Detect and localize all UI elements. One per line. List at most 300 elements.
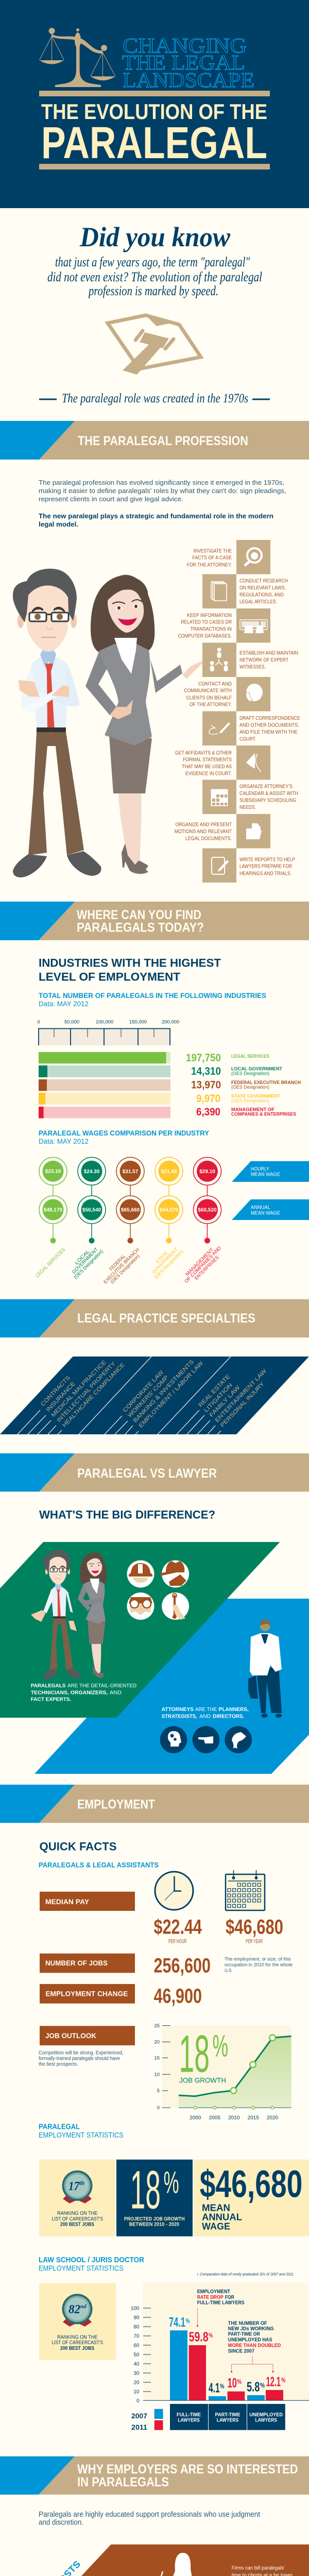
text: job outlook note: [39, 2050, 124, 2067]
values: 6,390: [196, 1106, 220, 1118]
panel: ranking 82nd: RANKING ON THE: [57, 2334, 98, 2340]
panel: ranking 82nd: 82: [68, 2303, 80, 2316]
chart: job growth: 18: [179, 2025, 210, 2083]
icon: eye profile: [246, 753, 261, 772]
stat: median pay values: [153, 1916, 283, 1945]
panel: mean annual wage: MEAN: [202, 2202, 230, 2213]
column: local government: LOCAL: [74, 1249, 91, 1266]
chart: JD employment: 60: [133, 2343, 140, 2348]
icon: head with gears: [160, 1726, 187, 1753]
column: specialties 3: PERSONAL INJURY: [219, 1381, 266, 1429]
chart: job growth: 2020: [267, 2115, 279, 2121]
task text list: GET AFFIDAVITS & OTHER: [175, 750, 232, 756]
note: employment size: U.S.: [225, 1968, 233, 1973]
did you know intro: profession is marked by speed.: [88, 283, 218, 298]
chart: job growth: 5: [157, 2088, 160, 2094]
heading: paralegal employment statistics: [39, 2123, 124, 2140]
industry labels: STATE GOVERNMENT: [231, 1093, 280, 1099]
chart: job growth: 2015: [248, 2115, 259, 2121]
task text list: OF THE ATTORNEY.: [190, 702, 232, 708]
icon: calendar: [226, 1870, 265, 1910]
heading: industries: [39, 957, 221, 984]
text: job outlook note: the best prospects.: [39, 2061, 78, 2067]
text: paralegals description: AND: [110, 1689, 122, 1696]
label: employment change: EMPLOYMENT CHANGE: [45, 1989, 128, 1997]
chart: JD employment: 80: [133, 2325, 140, 2330]
text: reduce costs: [232, 2565, 293, 2576]
heading: law school statistics: LAW SCHOOL / JURIS DOCTOR: [39, 2256, 144, 2264]
column: state government: $44,570: [160, 1208, 179, 1213]
banner: legal practice specialties: [0, 1299, 309, 1337]
bar values: 59.8: [189, 2329, 209, 2344]
illustration: attorney: [248, 1619, 282, 1718]
column: specialties 3: FAMILY LAW: [209, 1384, 242, 1418]
subtitle: changing the legal landscape: CHANGING: [123, 33, 247, 57]
chart: JD employment: 10: [133, 2389, 140, 2395]
banner: where can you find paralegals: WHERE CAN YOU FIND: [77, 908, 201, 922]
did you know intro: did not even exist? The evolution of the paralegal: [47, 269, 262, 284]
task text list: ORGANIZE ATTORNEY'S: [239, 784, 293, 789]
panel: projected job growth: 18: [130, 2160, 161, 2221]
panel: paralegals: [0, 1542, 280, 1718]
column: federal executive branch: FEDERAL: [108, 1253, 127, 1272]
icon: clock: [155, 1872, 193, 1910]
icon: big fish: [225, 1726, 252, 1753]
subtitle: changing the legal landscape: THE LEGAL: [122, 50, 245, 74]
legend: annual mean wage: [232, 1199, 309, 1220]
column: specialties 1: MEDICAL MALPRACTICE: [50, 1359, 108, 1418]
column: state government: [151, 1157, 185, 1280]
industry labels: FEDERAL EXECUTIVE BRANCH: [231, 1080, 301, 1086]
chart categories: UNEMPLOYED: [249, 2412, 283, 2418]
banner: paralegal vs lawyer: PARALEGAL VS LAWYER: [77, 1466, 217, 1481]
task text list: COURT.: [239, 736, 256, 742]
chart: job growth: 0: [157, 2105, 160, 2111]
bar values: [169, 2314, 286, 2395]
industry labels: (OES Designation): [231, 1084, 269, 1090]
hand left: [31, 1610, 45, 1622]
legend: hourly mean wage: [232, 1161, 309, 1182]
panel: mean annual wage: WAGE: [202, 2221, 230, 2231]
task text list: RELATED TO CASES OR: [181, 620, 232, 625]
illustration: paralegal woman presenting: [85, 575, 206, 874]
task text list: CALENDAR & ASSIST WITH: [239, 791, 298, 796]
column: management of companies: [183, 1157, 222, 1284]
bar values: %: [281, 2376, 286, 2384]
task text list: ORGANIZE AND PRESENT: [176, 822, 232, 828]
panel: ranking 82nd: [39, 2283, 116, 2360]
chart: job growth: 2005: [209, 2115, 220, 2121]
callout: role created in the 1970s: The paralegal role was created in the 1970s: [62, 392, 248, 405]
label: number of jobs: [40, 1954, 135, 1973]
label: median pay: [40, 1892, 135, 1911]
icon: documents: [211, 582, 227, 601]
text: profession description: making it easier to define paralegals' roles by what they can't do: sign pleadings,: [39, 487, 286, 495]
icon: scales of justice: [39, 28, 115, 87]
axis scale: 100,000: [96, 1020, 113, 1025]
column: federal executive branch: [102, 1157, 144, 1285]
values: 9,970: [196, 1093, 220, 1105]
column: management of companies: OF COMPANIES AND: [183, 1245, 222, 1284]
stat: median pay values: PER HOUR: [168, 1939, 186, 1945]
subheading: total number of paralegals: Data: MAY 2012: [39, 1000, 89, 1008]
industry labels: [231, 1054, 301, 1117]
column: management of companies: MANAGEMENT: [184, 1247, 215, 1277]
industry labels: MANAGEMENT OF: [231, 1107, 274, 1113]
values: 14,310: [191, 1065, 221, 1077]
chart: job growth: 15: [154, 2056, 160, 2061]
bar values: 10: [228, 2375, 237, 2391]
column: management of companies: ENTERPRISES: [194, 1255, 220, 1281]
task text list: FOR THE ATTORNEY.: [187, 562, 232, 568]
stat: median pay values: PER YEAR: [246, 1939, 263, 1945]
panel: ranking 17th: LIST OF CAREERCAST'S: [52, 2216, 103, 2222]
icon: detective hat: [160, 1560, 189, 1588]
banner: why employers are interested: IN PARALEGALS: [77, 2475, 169, 2489]
text: paralegals description: PARALEGALS: [31, 1683, 65, 1689]
chart categories: LAWYERS: [255, 2418, 277, 2424]
text: profession description: [39, 479, 286, 528]
industry labels: COMPANIES & ENTERPRISES: [231, 1112, 296, 1117]
icon: network: [210, 648, 228, 671]
column: federal executive branch: $31.57: [123, 1169, 139, 1175]
title: paralegal: PARALEGAL: [41, 118, 267, 168]
heading: paralegal employment statistics: EMPLOYMENT STATISTICS: [39, 2131, 124, 2140]
panel: reduce costs: [21, 2545, 309, 2576]
heading: industries: LEVEL OF EMPLOYMENT: [39, 971, 181, 984]
banner: paralegal vs lawyer: [0, 1453, 309, 1492]
heading: law school statistics: EMPLOYMENT STATISTICS: [39, 2264, 124, 2273]
task text list: AND OTHER DOCUMENTS,: [239, 722, 299, 728]
panel: ranking 17th: RANKING ON THE: [57, 2211, 98, 2216]
header panel: [0, 0, 309, 208]
stat: employment change: 46,900: [153, 1985, 202, 2008]
column: local government: $50,540: [82, 1208, 101, 1213]
bars: [39, 1052, 170, 1118]
chart: job growth: 2010: [228, 2115, 240, 2121]
chart: job growth: 10: [154, 2072, 160, 2077]
legend: hourly mean wage: HOURLY: [251, 1166, 269, 1172]
label: number of jobs: NUMBER OF JOBS: [45, 1959, 108, 1967]
stat: number of jobs: 256,600: [153, 1954, 211, 1977]
heading: industries: INDUSTRIES WITH THE HIGHEST: [39, 957, 221, 970]
icon: pointing hand: [193, 1726, 219, 1753]
bar values: %: [260, 2381, 265, 2389]
banner: where can you find paralegals: [0, 902, 309, 940]
column: specialties 3: ENTERTAINMENT LAW: [214, 1368, 268, 1423]
callout: rate drop: FULL-TIME LAWYERS: [197, 2300, 245, 2306]
chart: JD employment: 90: [133, 2315, 140, 2320]
text: paralegals description: FACT EXPERTS.: [31, 1697, 71, 1703]
banner: why employers are interested: [0, 2456, 309, 2495]
industry labels: LOCAL GOVERNMENT: [231, 1066, 282, 1072]
icon: price tag: [117, 2571, 163, 2576]
text: profession description: represent clients in court and give legal advice.: [39, 495, 183, 503]
chart: job growth: JOB GROWTH: [179, 2076, 226, 2084]
hand right: [68, 1621, 77, 1631]
chart: job growth: 25: [154, 2023, 160, 2029]
task text list: ON RELEVANT LAWS,: [239, 585, 286, 591]
icon: magnifier: [245, 548, 262, 566]
task text list: KEEP INFORMATION: [187, 613, 232, 618]
column: legal services: $23.16: [45, 1168, 61, 1175]
legend: annual mean wage: MEAN WAGE: [251, 1210, 280, 1216]
task text list: THAT MAY BE USED AS: [182, 764, 232, 770]
callout: part-time more than doubled: SINCE 2007: [228, 2348, 254, 2354]
banner: employment: [0, 1785, 309, 1823]
banner: the paralegal profession: THE PARALEGAL PROFESSION: [78, 434, 248, 448]
column: specialties 2: BANKING & INVESTMENTS: [132, 1359, 195, 1424]
label: job outlook: JOB OUTLOOK: [45, 2031, 96, 2040]
column: federal executive branch: (OES Designation): [109, 1253, 141, 1285]
chart categories: [170, 2404, 285, 2430]
task text list: FACTS OF A CASE: [193, 555, 232, 561]
task text list: TRANSACTIONS IN: [191, 626, 232, 632]
subheading: total number of paralegals: TOTAL NUMBER OF PARALEGALS IN THE FOLLOWING INDUSTRIES: [39, 992, 266, 999]
icon: woman silhouette: [168, 2553, 219, 2576]
panel: ranking 82nd: 200 BEST JOBS: [60, 2346, 94, 2351]
chart: job growth: [154, 2023, 291, 2121]
task text list: SUBSIDIARY SCHEDULING: [239, 798, 296, 804]
note: comparative data: i. Comparative data of newly graduated JDs of 2007 and 2011: [197, 2272, 294, 2277]
column: state government: (OES Designation): [153, 1249, 185, 1280]
bar values: 4.1: [209, 2380, 220, 2395]
chart categories: PART-TIME: [215, 2412, 241, 2418]
text: reduce costs: Firms can bill paralegals': [232, 2565, 285, 2571]
column: specialties 3: REAL ESTATE: [198, 1374, 232, 1409]
legend: years: 2007: [131, 2412, 147, 2420]
industry labels: LEGAL SERVICES: [231, 1054, 269, 1059]
panel: attorneys: [35, 1599, 309, 1774]
column: state government: STATE: [154, 1250, 169, 1265]
illustration: paralegal man with crossed arms: [13, 569, 101, 877]
column: specialties 2: CORPORATE LAW: [122, 1369, 165, 1414]
axis scale: [37, 1020, 179, 1045]
column: specialties 1: [40, 1359, 126, 1429]
callout: rate drop: EMPLOYMENT: [197, 2289, 230, 2295]
note: employment size: [225, 1957, 293, 1973]
icon: phone bubble: [246, 684, 263, 702]
heading: quick facts: QUICK FACTS: [39, 1840, 116, 1853]
text: paralegals description: [31, 1683, 136, 1703]
legend: hourly mean wage: MEAN WAGE: [251, 1172, 280, 1178]
panel: ranking 82nd: nd: [80, 2303, 87, 2310]
task text list: CLIENTS ON BEHALF: [186, 695, 232, 701]
column: specialties 1: HEALTHCARE COMPLIANCE: [61, 1362, 126, 1429]
chart: JD employment: 70: [133, 2334, 140, 2339]
chart: job growth: 2000: [190, 2115, 201, 2121]
icon: binoculars: [127, 1592, 154, 1620]
text: job outlook note: formally-trained paralegals should have: [39, 2056, 120, 2061]
subheading: total number of paralegals: [39, 992, 266, 1008]
text: paralegals description: TECHNICIANS, ORGANIZERS,: [31, 1689, 108, 1696]
callout: part-time more than doubled: PART-TIME OR: [228, 2332, 260, 2337]
chart: JD employment: 100: [131, 2306, 140, 2311]
column: state government: GOVERNMENT: [151, 1247, 179, 1275]
illustration: woman: [78, 1552, 107, 1677]
text: paralegals description: ARE THE DETAIL-ORIENTED: [67, 1683, 136, 1689]
tasks checkerboard: [175, 540, 300, 883]
icon: report and pen: [212, 857, 229, 874]
text: attorneys description: [162, 1706, 249, 1719]
task text list: DRAFT CORRESPONDENCE: [239, 716, 300, 721]
subtitle: changing the legal landscape: LANDSCAPE: [123, 68, 254, 92]
column: specialties 1: CONTRACTS: [40, 1375, 72, 1408]
text: job outlook note: Competition will be strong. Experienced,: [39, 2050, 124, 2056]
column: federal executive branch: EXECUTIVE BRANCH: [102, 1247, 141, 1285]
column: legal services: $48,170: [44, 1208, 63, 1213]
panel: ranking 17th: 200 BEST JOBS: [60, 2222, 94, 2228]
subtitle: changing the legal landscape: [122, 33, 254, 92]
text: attorneys description: ATTORNEYS: [162, 1706, 194, 1713]
text: highly educated professionals: Paralegals are highly educated support professionals who use judgment: [39, 2510, 261, 2519]
label: employment change: [40, 1984, 135, 2004]
task text list: COMPUTER DATABASES.: [178, 633, 232, 639]
bar values: %: [220, 2382, 225, 2390]
chart: JD employment: 0: [136, 2398, 140, 2404]
task text list: REGULATIONS, AND: [239, 592, 284, 598]
icon: pen signing: [209, 722, 230, 734]
column: legal services: [35, 1157, 67, 1279]
callout: rate drop: [197, 2289, 245, 2327]
column: specialties 1: INSURANCE: [45, 1381, 77, 1413]
icon: calendar grid: [211, 789, 228, 806]
heading: what's the big difference: WHAT'S THE BIG DIFFERENCE?: [39, 1509, 215, 1521]
axis scale: 200,000: [162, 1020, 179, 1025]
task text list: [175, 548, 300, 876]
text: highly educated professionals: and discretion.: [39, 2518, 83, 2527]
values: 13,970: [191, 1079, 221, 1091]
stat: median pay values: $22.44: [153, 1916, 202, 1938]
column: specialties 1: INTELLECTUAL PROPERTY: [56, 1361, 117, 1423]
subheading: wages comparison: Data: MAY 2012: [39, 1138, 89, 1145]
column: legal services: LEGAL SERVICES: [35, 1247, 66, 1279]
task text list: HEARINGS AND TRIALS.: [239, 871, 291, 876]
legend: annual mean wage: ANNUAL: [251, 1205, 270, 1211]
did you know intro: Did you know: [79, 222, 231, 252]
column: specialties 2: [122, 1359, 205, 1429]
task text list: NETWORK OF EXPERT: [239, 657, 288, 663]
stat: median pay values: $46,680: [226, 1916, 283, 1938]
callout: part-time more than doubled: [228, 2320, 281, 2372]
task text list: EVIDENCE IN COURT.: [185, 771, 232, 776]
bar values: 74.1: [169, 2314, 185, 2330]
panel: projected job growth: BETWEEN 2010 - 2020: [129, 2222, 179, 2228]
task text list: COMMUNICATE WITH: [184, 688, 232, 694]
illustration: man: [43, 1550, 80, 1680]
column: local government: [71, 1157, 106, 1280]
bar values: 12.1: [266, 2374, 281, 2389]
callout: part-time more than doubled: MORE THAN DOUBLED: [228, 2343, 281, 2348]
icon: folder: [246, 823, 262, 839]
column: specialties 3: LITIGATION: [203, 1382, 234, 1414]
task text list: MOTIONS AND RELEVANT: [175, 829, 232, 835]
icon: keyboard: [240, 620, 267, 633]
panel: ranking 17th: th: [79, 2179, 84, 2187]
heading: law school statistics: [39, 2256, 144, 2273]
bar values: 5.8: [247, 2379, 260, 2395]
callout: part-time more than doubled: NEW JDs WORKING: [228, 2326, 274, 2332]
note: employment size: occupation in 2010 for the whole: [225, 1962, 293, 1968]
chart: wage circles: [35, 1157, 222, 1285]
heading: paralegal employment statistics: PARALEGAL: [39, 2123, 80, 2131]
chart categories: FULL-TIME: [177, 2412, 201, 2418]
task text list: CONTACT AND: [198, 681, 232, 687]
axis scale: 0: [37, 1020, 40, 1025]
column: local government: GOVERNMENT: [71, 1247, 99, 1275]
axis scale: 150,000: [129, 1020, 147, 1025]
bar chart: employment by industry: [37, 1020, 301, 1118]
column: federal executive branch: $65,660: [121, 1208, 140, 1213]
values: 197,750: [186, 1052, 221, 1064]
subheading: paralegals and legal assistants: PARALEGALS & LEGAL ASSISTANTS: [39, 1860, 159, 1869]
task text list: CONDUCT RESEARCH: [239, 579, 288, 584]
column: management of companies: $60,520: [198, 1208, 217, 1213]
callout: part-time more than doubled: UNEMPLOYED HAS: [228, 2337, 272, 2343]
industry labels: (OES Designation): [231, 1098, 269, 1104]
banner: the paralegal profession: [0, 421, 309, 460]
text: attorneys description: PLANNERS,: [219, 1706, 249, 1713]
panel: ranking 17th: [39, 2160, 115, 2236]
label: median pay: MEDIAN PAY: [45, 1897, 90, 1906]
chart: JD employment: 40: [133, 2362, 140, 2367]
icon: hard hat: [127, 1560, 154, 1588]
subheading: wages comparison: [39, 1129, 210, 1145]
text: attorneys description: STRATEGISTS,: [162, 1713, 197, 1719]
panel: specialties: [0, 1357, 309, 1434]
text: attorneys description: DIRECTORS.: [213, 1713, 244, 1719]
column: specialties 2: EMPLOYMENT / LABOR LAW: [138, 1360, 205, 1429]
icon: gavel on document: [108, 315, 201, 375]
banner: employment: EMPLOYMENT: [77, 1798, 155, 1812]
subheading: wages comparison: PARALEGAL WAGES COMPARISON PER INDUSTRY: [39, 1129, 210, 1137]
chart: job growth: %: [212, 2029, 228, 2063]
text: profession description: The new paralegal plays a strategic and fundamental role in the modern: [39, 512, 273, 520]
column: specialties 2: WORKERS' COMP: [127, 1375, 170, 1419]
task text list: LAWYERS PREPARE FOR: [239, 864, 292, 870]
chart: JD employment: 30: [133, 2371, 140, 2376]
panel: ranking 17th: 17: [68, 2180, 80, 2193]
panel: mean annual wage: [194, 2160, 309, 2236]
column: local government: (OES Designation): [73, 1249, 105, 1280]
text: profession description: legal model.: [39, 520, 78, 528]
bar values: %: [185, 2317, 190, 2325]
chart: job growth: 20: [154, 2039, 160, 2045]
callout: rate drop: RATE DROP: [197, 2295, 224, 2300]
column: state government: $21.43: [161, 1169, 177, 1175]
panel: ranking 82nd: LIST OF CAREERCAST'S: [52, 2340, 103, 2346]
callout: part-time more than doubled: THE NUMBER OF: [228, 2320, 267, 2326]
bar values: %: [237, 2378, 242, 2385]
did you know intro: that just a few years ago, the term "paralegal": [55, 255, 250, 269]
text: profession description: The paralegal profession has evolved significantly since it emerged in the 1970s,: [39, 479, 284, 486]
column: local government: $24.30: [84, 1169, 100, 1175]
task text list: INVESTIGATE THE: [193, 548, 232, 554]
task text list: FORMAL STATEMENTS: [183, 757, 232, 763]
axis scale: 50,000: [64, 1020, 79, 1025]
label: job outlook: [40, 2026, 135, 2045]
panel: projected job growth: [116, 2160, 193, 2236]
task text list: WRITE REPORTS TO HELP: [239, 857, 295, 862]
task text list: LEGAL ARTICLES.: [239, 599, 277, 605]
text: attorneys description: AND: [199, 1713, 211, 1719]
bar values: %: [209, 2331, 213, 2339]
text: highly educated professionals: [39, 2510, 261, 2527]
panel: projected job growth: %: [164, 2165, 179, 2200]
task text list: ESTABLISH AND MAINTAIN: [239, 651, 298, 656]
title: the evolution of the: THE EVOLUTION OF THE: [41, 99, 267, 124]
chart categories: LAWYERS: [217, 2418, 238, 2424]
